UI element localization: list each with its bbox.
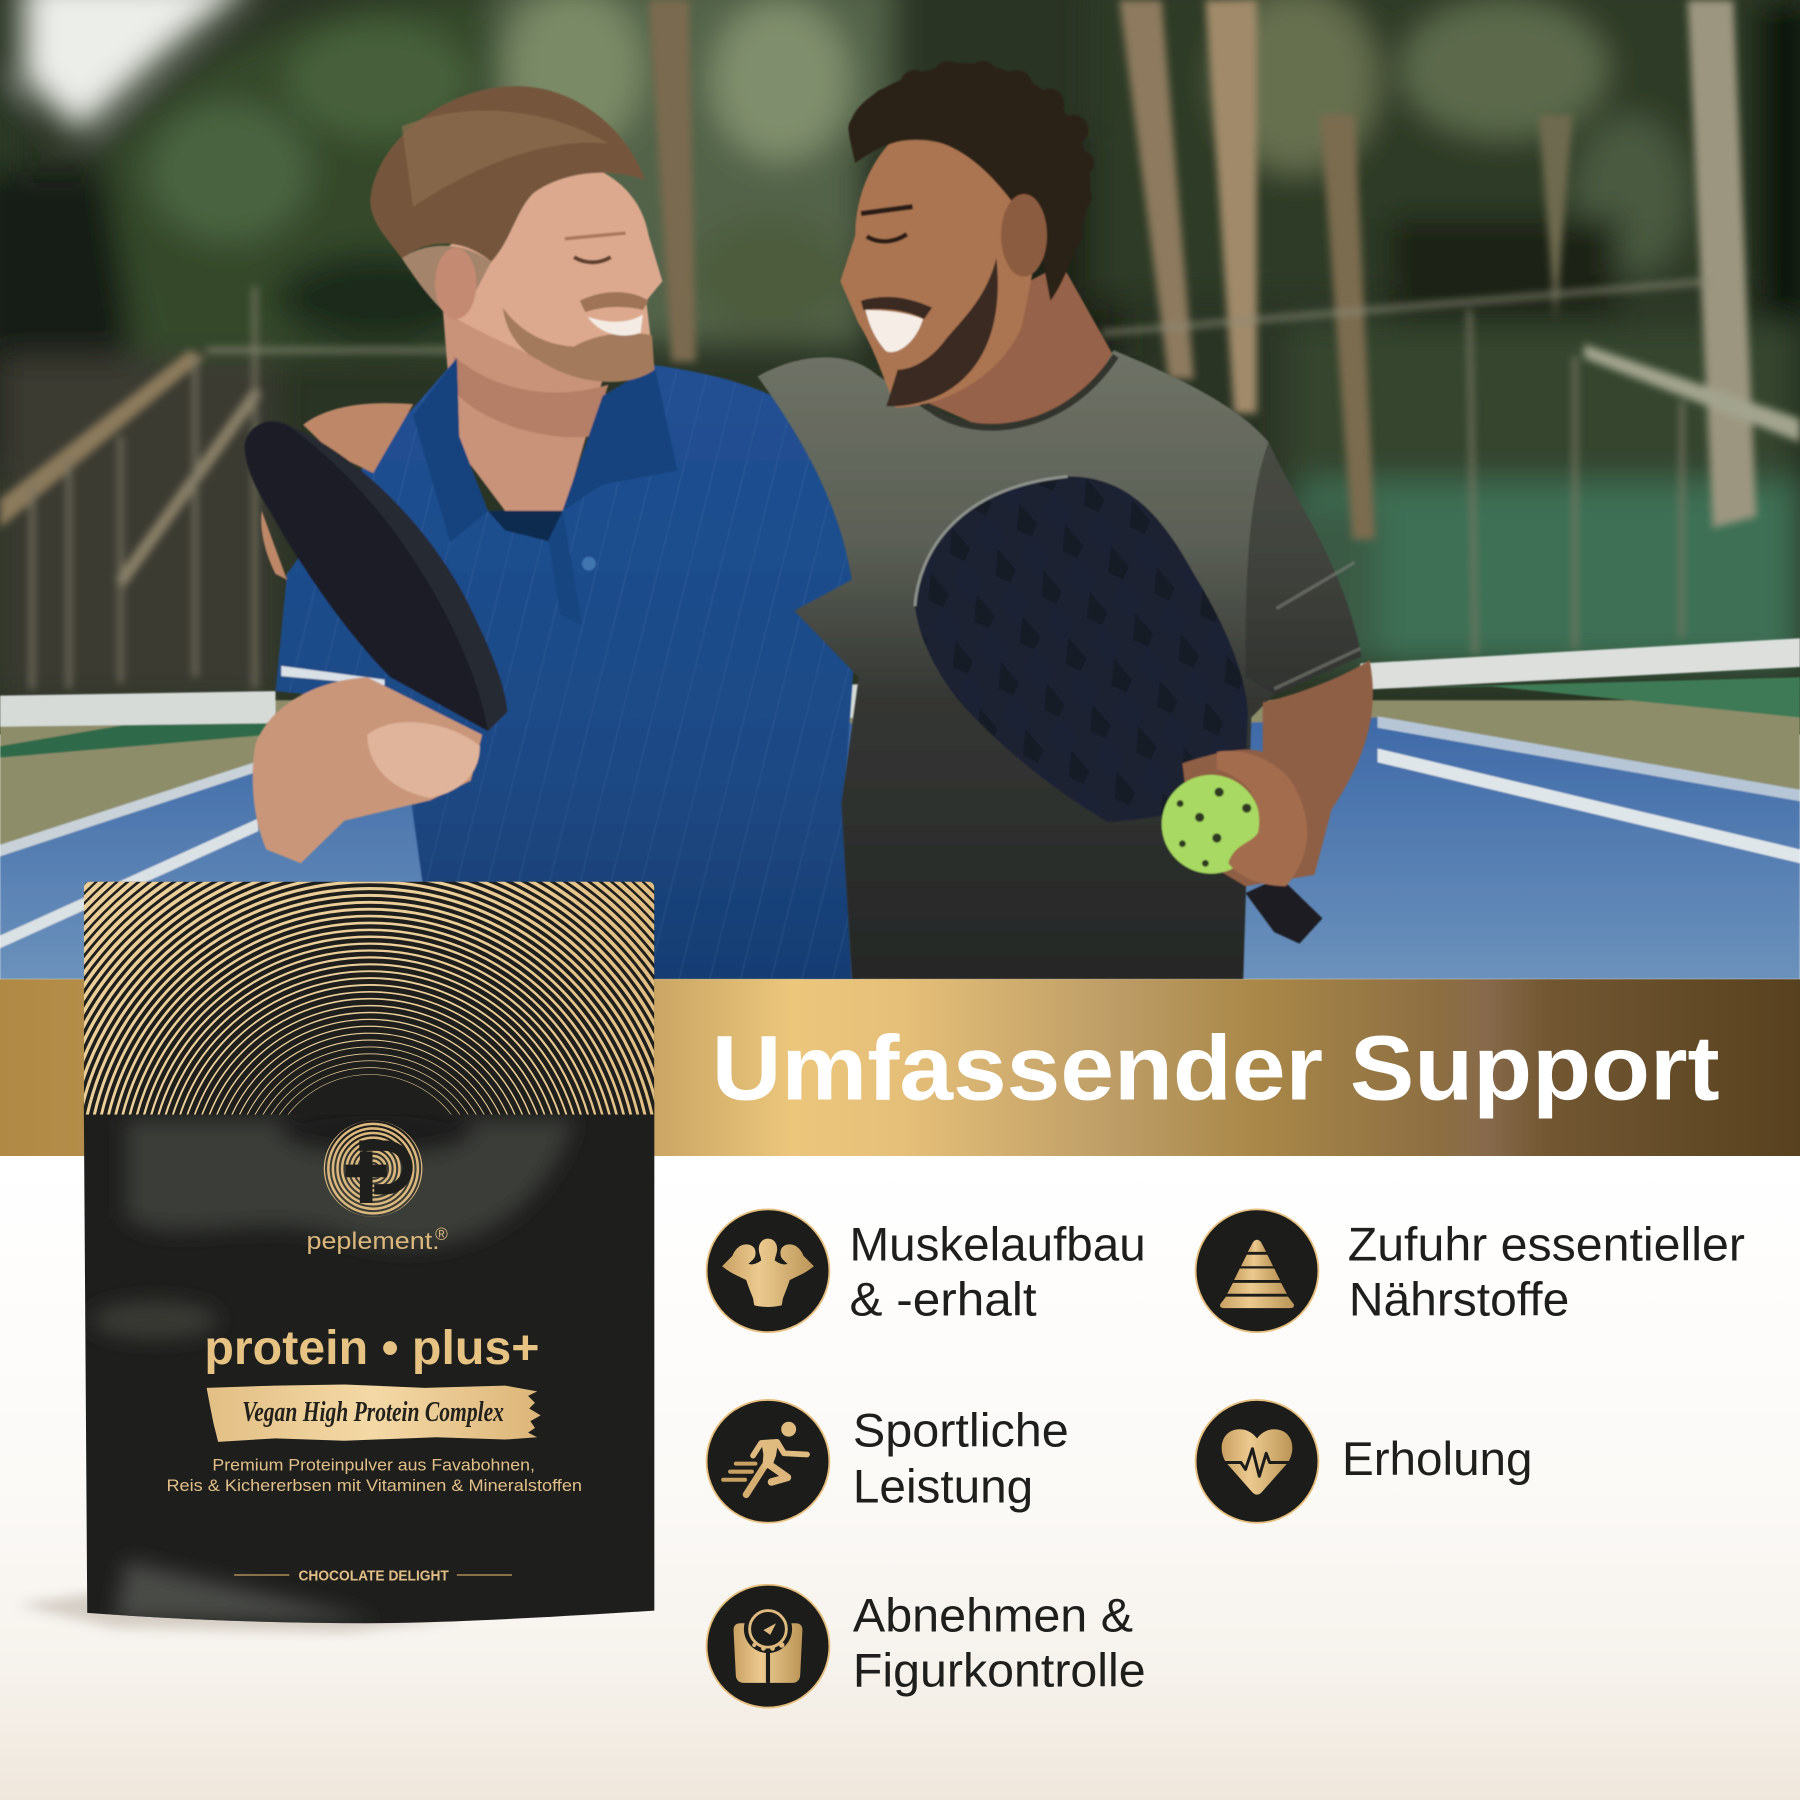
brand name: peplement.: [307, 1228, 440, 1255]
sleeve shading: [1246, 442, 1361, 695]
label: Sportliche Leistung: Sportliche: [853, 1403, 1069, 1456]
polo collar: [413, 358, 677, 542]
pouch body: [84, 1102, 654, 1623]
pouch gold line pattern: [0, 758, 790, 1598]
pouch shadow: [17, 1593, 459, 1632]
brand logo: fingerprint P+: [324, 1119, 422, 1218]
brush stroke tag: [207, 1384, 541, 1442]
face: [840, 140, 1039, 408]
pouch sheen: [92, 1105, 574, 1621]
hair: [848, 61, 1094, 301]
ear: [1001, 194, 1047, 277]
ear: [435, 248, 476, 319]
flavour line: CHOCOLATE DELIGHT: [298, 1569, 449, 1585]
fingers over ball: [1217, 751, 1307, 886]
product description: [166, 1456, 582, 1495]
eye and brow: [565, 233, 626, 239]
label: Sportliche Leistung: Leistung: [853, 1460, 1033, 1513]
label: Nährstoffe: Nährstoffe: [1349, 1273, 1569, 1326]
label: Nährstoffe: Zufuhr essentieller: [1348, 1217, 1745, 1270]
label: Nährstoffe: [1348, 1217, 1745, 1326]
sleeve light stripes: [1274, 562, 1360, 689]
neck and chest: [442, 311, 603, 512]
collar: [925, 356, 1116, 427]
eye and brow: [861, 207, 913, 214]
label: Abnehmen: Figurkontrolle: [853, 1643, 1146, 1696]
icon: pyramid: [1196, 1209, 1318, 1332]
item: Abnehmen: [707, 1585, 1146, 1708]
left paddle: [245, 422, 507, 731]
left player: [245, 86, 859, 979]
pickleball: [1162, 775, 1260, 874]
gold title band: [0, 979, 1800, 1156]
neck: [928, 272, 1113, 425]
right player: [758, 61, 1373, 979]
hand on shoulder: [261, 403, 413, 580]
photo: two pickleball players on court: [0, 0, 1800, 979]
smile: [588, 315, 643, 336]
label: Sportliche Leistung: [853, 1403, 1069, 1513]
forearm and hand: [253, 677, 482, 863]
item: Nährstoffe: [1196, 1209, 1745, 1332]
product description: Premium Proteinpulver aus Favabohnen,: [212, 1456, 535, 1475]
photo background: trees and sky: [0, 0, 1800, 735]
icon: runner: [707, 1400, 829, 1523]
registered mark: ®: [435, 1224, 448, 1244]
label: Muskelaufbau: & -erhalt: [849, 1273, 1037, 1326]
label: Muskelaufbau: Muskelaufbau: [849, 1217, 1146, 1270]
hair: [370, 86, 645, 262]
icon: bathroom scale: [707, 1585, 829, 1708]
item: Muskelaufbau: [707, 1209, 1146, 1332]
arm: [1182, 660, 1373, 886]
laughing mouth: [866, 310, 923, 352]
right paddle: [915, 476, 1248, 822]
icon: flexing muscles: [707, 1209, 829, 1332]
beard: [886, 258, 998, 406]
item: Erholung: [1196, 1400, 1533, 1523]
polo button: [582, 557, 596, 571]
paddle handle: [1246, 877, 1322, 944]
label: Abnehmen: Abnehmen &: [853, 1588, 1133, 1641]
label: Erholung: Erholung: [1342, 1432, 1533, 1485]
face: [448, 172, 664, 376]
polo shirt: [276, 358, 859, 979]
icon: heart with pulse: [1196, 1400, 1318, 1523]
grey t-shirt: [758, 350, 1361, 979]
palm trunks and fence: [0, 0, 1800, 689]
product name: protein • plus+: [204, 1321, 540, 1375]
item: Sportliche Leistung: [707, 1400, 1069, 1523]
title: Umfassender Support: [712, 1018, 1720, 1120]
label: Muskelaufbau: [849, 1217, 1146, 1326]
brush stroke tag: Vegan High Protein Complex: [242, 1396, 504, 1428]
stubble: [503, 308, 654, 382]
label: Abnehmen: [853, 1588, 1146, 1696]
product description: Reis & Kichererbsen mit Vitaminen & Mineralstoffen: [166, 1476, 582, 1495]
court surface, net and lines: [0, 638, 1800, 979]
benefit list: [707, 1209, 1745, 1708]
product pouch: [0, 758, 790, 1632]
